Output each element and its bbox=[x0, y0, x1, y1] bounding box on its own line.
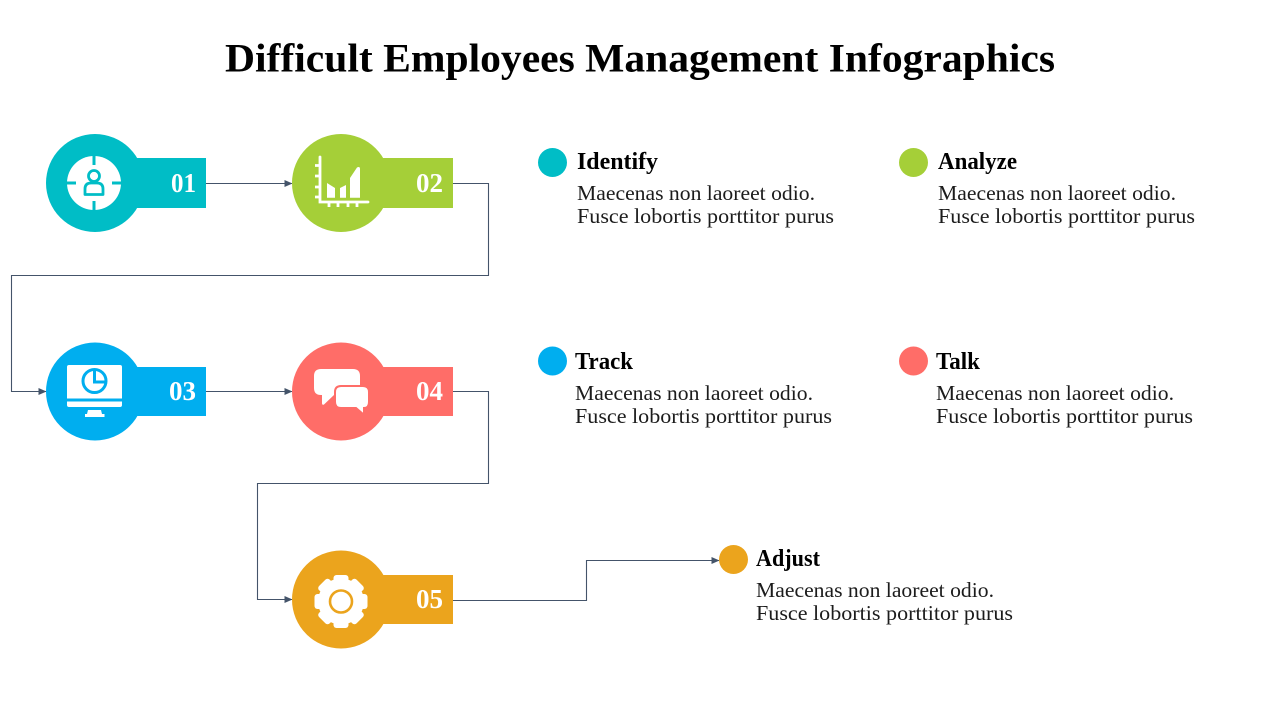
number 02: 02 bbox=[416, 168, 443, 198]
legend: Adjust: Adjust bbox=[756, 546, 820, 572]
number 03: 03 bbox=[169, 376, 196, 406]
arrow: step 1 to step 2 bbox=[206, 182, 292, 184]
arrow: step 4 to step 5 bbox=[258, 392, 488, 600]
icon: monitor with pie chart bbox=[67, 365, 122, 417]
step 03 badge bbox=[46, 342, 206, 440]
number 04: 04 bbox=[416, 376, 443, 406]
legend: Analyze bbox=[899, 148, 1195, 228]
title: Difficult Employees Management Infographics bbox=[225, 36, 1055, 80]
legend: Identify: Maecenas non laoreet odio. bbox=[577, 181, 815, 205]
legend: Adjust: Fusce lobortis porttitor purus bbox=[756, 601, 1013, 625]
legend: Talk: Talk bbox=[936, 349, 981, 375]
arrow: step 5 to adjust bbox=[453, 560, 719, 600]
arrow: step 2 to step 3 bbox=[12, 184, 488, 392]
legend: Adjust bbox=[719, 545, 1013, 625]
legend: Analyze: Fusce lobortis porttitor purus bbox=[938, 204, 1195, 228]
step 04 badge bbox=[292, 342, 453, 440]
icon: bar chart bbox=[315, 157, 368, 207]
legend: Track bbox=[538, 346, 832, 428]
legend: Identify: Identify bbox=[577, 149, 658, 175]
number 05: 05 bbox=[416, 584, 443, 614]
icon: target person bbox=[67, 156, 121, 210]
icon: gear bbox=[314, 575, 368, 628]
step 01 badge bbox=[46, 134, 206, 232]
legend: Talk: Maecenas non laoreet odio. bbox=[936, 381, 1174, 405]
legend: Track: Track bbox=[575, 349, 634, 375]
arrow: step 3 to step 4 bbox=[206, 390, 292, 392]
legend: Analyze: Analyze bbox=[938, 149, 1017, 175]
icon: speech bubbles bbox=[314, 369, 369, 414]
legend: Adjust: Maecenas non laoreet odio. bbox=[756, 578, 994, 602]
step 02 badge bbox=[292, 134, 453, 232]
legend: Identify bbox=[538, 148, 834, 228]
legend: Talk: Fusce lobortis porttitor purus bbox=[936, 404, 1193, 428]
number 01: 01 bbox=[171, 168, 196, 198]
legend: Track: Maecenas non laoreet odio. bbox=[575, 381, 813, 405]
legend: Talk bbox=[899, 346, 1193, 428]
legend: Identify: Fusce lobortis porttitor purus bbox=[577, 204, 834, 228]
step 05 badge bbox=[292, 550, 453, 648]
legend: Analyze: Maecenas non laoreet odio. bbox=[938, 181, 1176, 205]
legend: Track: Fusce lobortis porttitor purus bbox=[575, 404, 832, 428]
